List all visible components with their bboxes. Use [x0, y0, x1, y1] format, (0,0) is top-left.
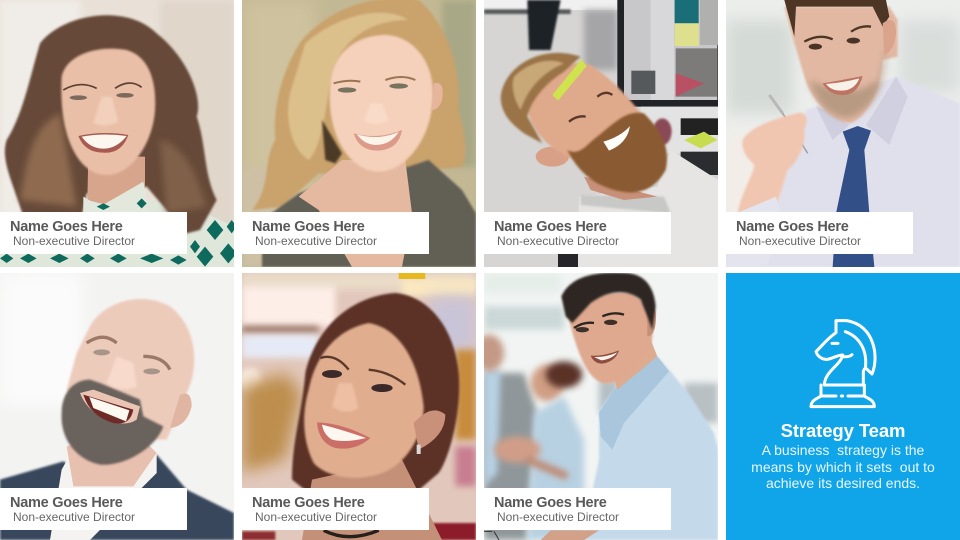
name: Name Goes Here	[736, 218, 849, 234]
photo: smiling woman with curly brown hair	[0, 0, 234, 267]
role: Non-executive Director	[497, 510, 619, 524]
name card	[242, 212, 429, 254]
role: Non-executive Director	[13, 510, 135, 524]
role: Non-executive Director	[497, 234, 619, 248]
name: Name Goes Here	[252, 494, 365, 510]
name: Name Goes Here	[494, 494, 607, 510]
name card	[0, 212, 187, 254]
panel: team member 3	[484, 0, 718, 267]
panel: team member 1	[0, 0, 234, 267]
name: Name Goes Here	[10, 218, 123, 234]
description text	[751, 442, 935, 491]
name card	[484, 212, 671, 254]
description text: means by which it sets out to	[751, 459, 935, 475]
icon: chess knight	[810, 319, 877, 408]
photo: smiling woman with brown hair on blurred lights	[242, 273, 476, 540]
photo: laughing bald man with beard	[0, 273, 234, 540]
heading: Strategy Team	[781, 420, 905, 441]
name: Name Goes Here	[494, 218, 607, 234]
name card	[0, 488, 187, 530]
name card	[726, 212, 913, 254]
role: Non-executive Director	[255, 234, 377, 248]
description text: A business strategy is the	[762, 442, 924, 458]
panel: strategy team	[726, 273, 960, 540]
panel: team member 4	[726, 0, 960, 267]
panel: team member 2	[242, 0, 476, 267]
name: Name Goes Here	[10, 494, 123, 510]
name: Name Goes Here	[252, 218, 365, 234]
panel: team member 5	[0, 273, 234, 540]
role: Non-executive Director	[255, 510, 377, 524]
description text: achieve its desired ends.	[766, 475, 920, 491]
role: Non-executive Director	[739, 234, 861, 248]
name card	[242, 488, 429, 530]
photo: man in shirt and tie holding pen	[726, 0, 960, 267]
photo: laughing bearded man with sticky note	[484, 0, 718, 267]
panel: team member 7	[484, 273, 718, 540]
photo: smiling blonde woman	[242, 0, 476, 267]
role: Non-executive Director	[13, 234, 135, 248]
panel: team member 6	[242, 273, 476, 540]
name card	[484, 488, 671, 530]
photo: smiling man in blue shirt in office	[484, 273, 718, 540]
